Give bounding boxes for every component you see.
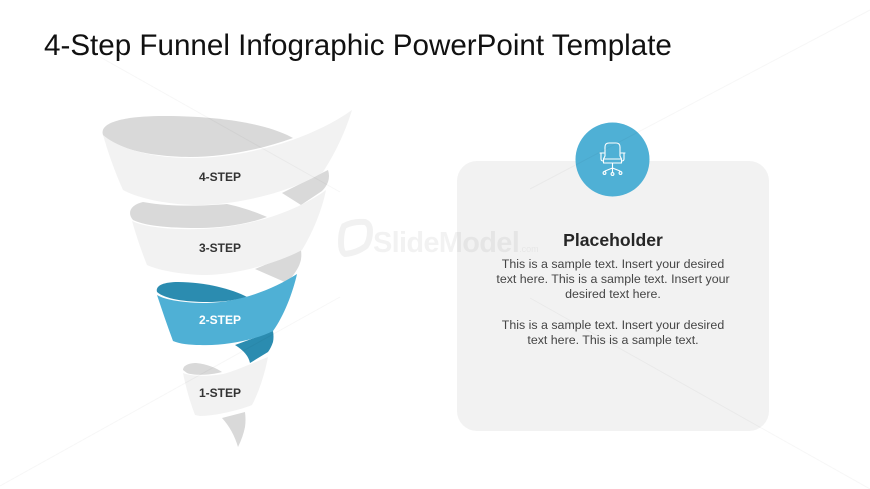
icon: blue circle with office chair — [576, 122, 650, 196]
text block 2 — [502, 318, 724, 347]
watermark: SlideModel logo: SlideModel.com — [373, 227, 539, 259]
funnel level: 2-step — [157, 274, 297, 363]
funnel level: 3-step — [130, 190, 326, 283]
text block 1: desired text here. — [565, 287, 661, 301]
text block 1: This is a sample text. Insert your desired — [502, 257, 724, 271]
text block 1: text here. This is a sample text. Insert your — [496, 272, 730, 286]
label: 4-STEP: 4-STEP — [199, 170, 241, 184]
funnel level: 4-step — [103, 110, 352, 205]
title: 4-Step Funnel Infographic PowerPoint Template — [44, 29, 672, 62]
text block 1 — [496, 257, 730, 301]
label: 3-STEP: 3-STEP — [199, 241, 241, 255]
text block 2: This is a sample text. Insert your desired — [502, 318, 724, 332]
label: 2-STEP: 2-STEP — [199, 313, 241, 327]
label: 1-STEP: 1-STEP — [199, 386, 241, 400]
heading: Placeholder: Placeholder — [563, 230, 663, 250]
text block 2: text here. This is a sample text. — [527, 333, 699, 347]
panel: placeholder card — [457, 161, 769, 431]
funnel level: 1-step — [183, 357, 268, 447]
watermark: SlideModel logo — [338, 219, 539, 259]
